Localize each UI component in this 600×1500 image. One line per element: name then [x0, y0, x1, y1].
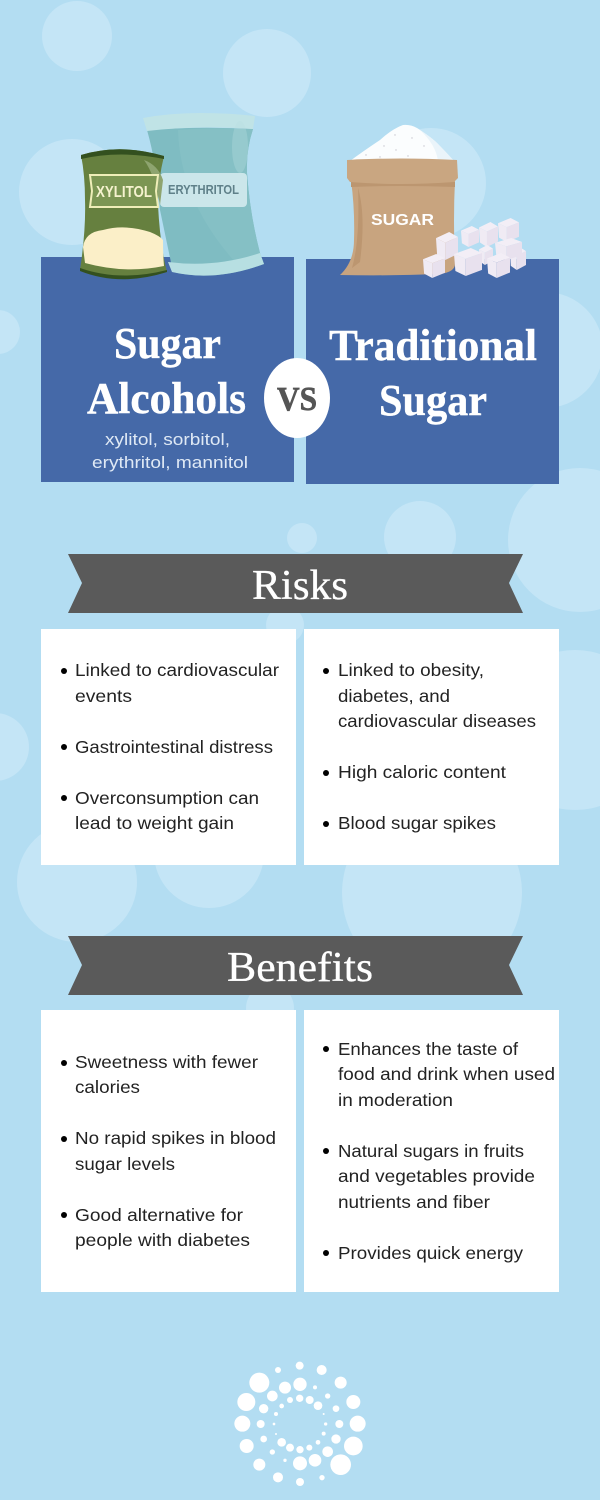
panel: traditional sugar benefits: in moderation: [338, 1090, 453, 1110]
panel: sugar alcohol benefits: Sweetness with fewer: [75, 1052, 258, 1072]
heading: traditional sugar: Sugar: [379, 376, 487, 425]
panel: sugar alcohol benefits: people with diabetes: [75, 1230, 250, 1250]
text: sugar alcohol types: [92, 430, 248, 472]
text: sugar alcohol types: xylitol, sorbitol,: [105, 430, 230, 449]
icon: erythritol pouch: ERYTHRITOL: [168, 183, 239, 197]
panel: sugar alcohol benefits: sugar levels: [75, 1154, 175, 1174]
panel: traditional sugar risks: Blood sugar spikes: [338, 813, 496, 833]
banner: risks: [68, 554, 523, 613]
icon: xylitol can: XYLITOL: [96, 184, 152, 201]
panel: sugar alcohol risks: Gastrointestinal distress: [75, 737, 273, 757]
panel: traditional sugar benefits: nutrients and fiber: [338, 1192, 490, 1212]
panel: sugar alcohol benefits: calories: [75, 1077, 140, 1097]
panel: sugar alcohol risks: Overconsumption can: [75, 788, 259, 808]
icon: sugar sack: [340, 125, 458, 275]
panel: sugar alcohol risks: lead to weight gain: [75, 813, 234, 833]
panel: traditional sugar risks: cardiovascular diseases: [338, 711, 536, 731]
icon: sugar sack: SUGAR: [371, 212, 434, 229]
banner: benefits: Benefits: [227, 945, 373, 991]
panel: sugar alcohol risks: events: [75, 686, 132, 706]
panel: traditional sugar risks: [304, 629, 559, 865]
vs badge: [264, 358, 330, 438]
panel: sugar alcohol benefits: Good alternative for: [75, 1205, 243, 1225]
panel: traditional sugar benefits: Natural sugars in fruits: [338, 1141, 524, 1161]
panel: sugar alcohol risks: [41, 629, 296, 865]
panel: traditional sugar benefits: [304, 1010, 559, 1292]
panel: traditional sugar risks: diabetes, and: [338, 686, 450, 706]
text: sugar alcohol types: erythritol, mannitol: [92, 453, 248, 472]
heading: sugar alcohols: Alcohols: [87, 374, 246, 423]
heading: sugar alcohols: Sugar: [114, 319, 221, 368]
icon: sugar cubes: [423, 218, 526, 278]
banner: benefits: [68, 936, 523, 995]
panel: sugar alcohol benefits: No rapid spikes in blood: [75, 1128, 276, 1148]
heading: traditional sugar: Traditional: [329, 321, 537, 370]
heading: sugar alcohols: [87, 319, 246, 423]
icon: erythritol pouch: [143, 113, 264, 276]
icon: xylitol can: [80, 149, 167, 279]
heading: traditional sugar: [329, 321, 537, 425]
panel: sugar alcohol benefits: [41, 1010, 296, 1292]
logo: dot spiral: [234, 1362, 366, 1486]
panel: traditional sugar risks: Linked to obesity,: [338, 660, 484, 680]
panel: traditional sugar header: [306, 125, 559, 484]
panel: traditional sugar benefits: Provides quick energy: [338, 1243, 523, 1263]
panel: sugar alcohol risks: Linked to cardiovascular: [75, 660, 279, 680]
panel: traditional sugar benefits: food and drink when used: [338, 1064, 555, 1084]
vs badge: VS: [277, 381, 317, 418]
banner: risks: Risks: [252, 563, 348, 609]
panel: sugar alcohols header: [41, 113, 294, 482]
panel: traditional sugar benefits: Enhances the taste of: [338, 1039, 518, 1059]
panel: traditional sugar benefits: and vegetables provide: [338, 1166, 535, 1186]
panel: traditional sugar risks: High caloric content: [338, 762, 506, 782]
